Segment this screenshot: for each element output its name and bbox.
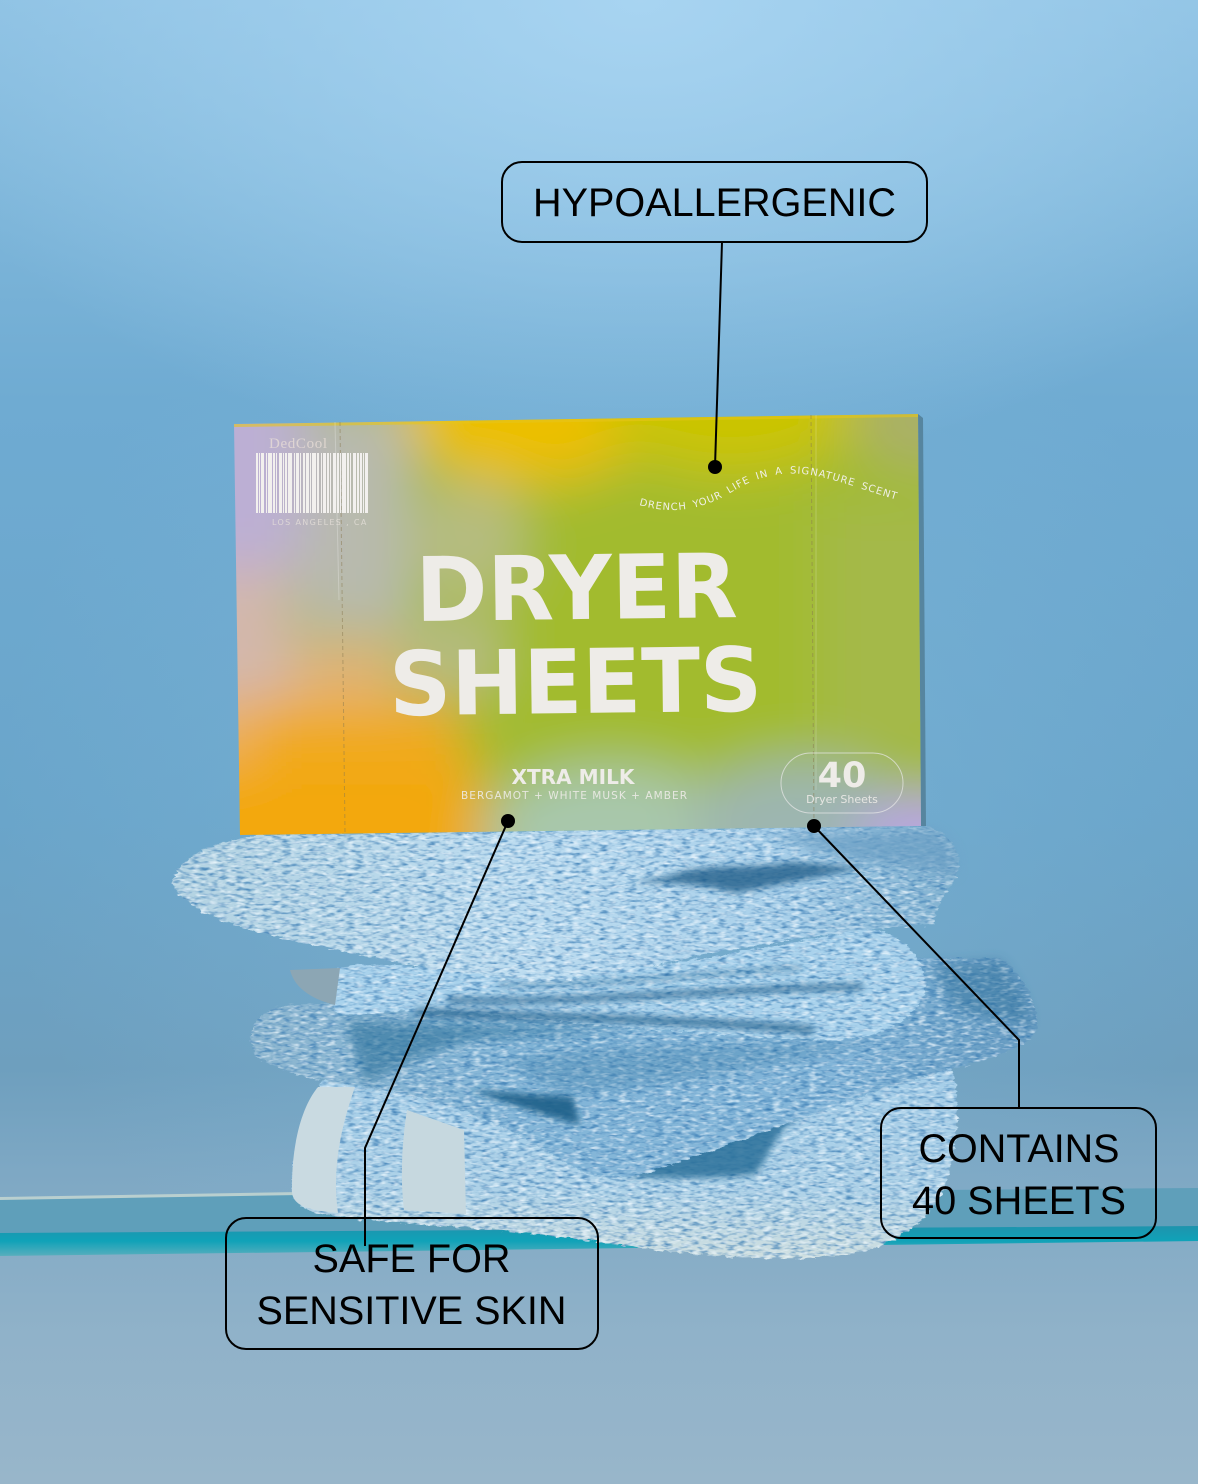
box title: DRYER	[415, 534, 738, 642]
towel: rolled	[332, 930, 925, 1040]
count badge: 40	[818, 756, 866, 796]
towel: middle shadow	[345, 1020, 640, 1085]
towel: bottom shadow	[626, 1068, 935, 1178]
towel: inner fold shadow	[470, 1090, 580, 1125]
box title: SHEETS	[388, 628, 763, 736]
callout: safe for sensitive skin: SAFE FOR	[312, 1237, 510, 1281]
towel: middle band shadow	[500, 1040, 880, 1095]
towel: rolled shadow bands	[420, 968, 860, 1030]
location text: LOS ANGELES , CA	[272, 518, 368, 527]
box perforation seams	[335, 415, 816, 832]
towel: bottom hems	[292, 1087, 355, 1213]
scent name: XTRA MILK	[512, 765, 636, 789]
box title	[388, 534, 763, 736]
box gradient	[234, 414, 921, 835]
callout: safe for sensitive skin	[226, 814, 598, 1349]
curved tagline: DRENCH YOUR LIFE IN A SIGNATURE SCENT	[640, 466, 898, 510]
count badge	[781, 753, 903, 813]
callout: contains 40 sheets: 40 SHEETS	[912, 1179, 1126, 1223]
towel: right dark	[760, 828, 956, 875]
towel: top fold shadow	[631, 862, 862, 893]
count badge: Dryer Sheets	[806, 793, 878, 806]
callout: safe for sensitive skin: SENSITIVE SKIN	[256, 1289, 566, 1333]
glass shelf	[0, 1188, 1198, 1256]
scent notes: BERGAMOT + WHITE MUSK + AMBER	[461, 790, 687, 802]
callout: contains 40 sheets: CONTAINS	[918, 1127, 1120, 1171]
towel stack	[172, 826, 1037, 1258]
towel: right corner shadow	[930, 960, 1030, 1025]
callout: hypoallergenic	[502, 162, 927, 474]
callout: hypoallergenic: HYPOALLERGENIC	[533, 181, 896, 225]
box side edge	[918, 414, 926, 826]
towel: bottom	[292, 1065, 957, 1258]
towel: top	[172, 826, 959, 980]
towel: left shadow	[290, 968, 340, 1005]
callout: contains 40 sheets	[807, 819, 1156, 1238]
towel: middle wide	[250, 958, 1037, 1177]
barcode	[256, 453, 369, 513]
product box	[234, 414, 926, 835]
brand wordmark: DedCool	[269, 436, 327, 452]
